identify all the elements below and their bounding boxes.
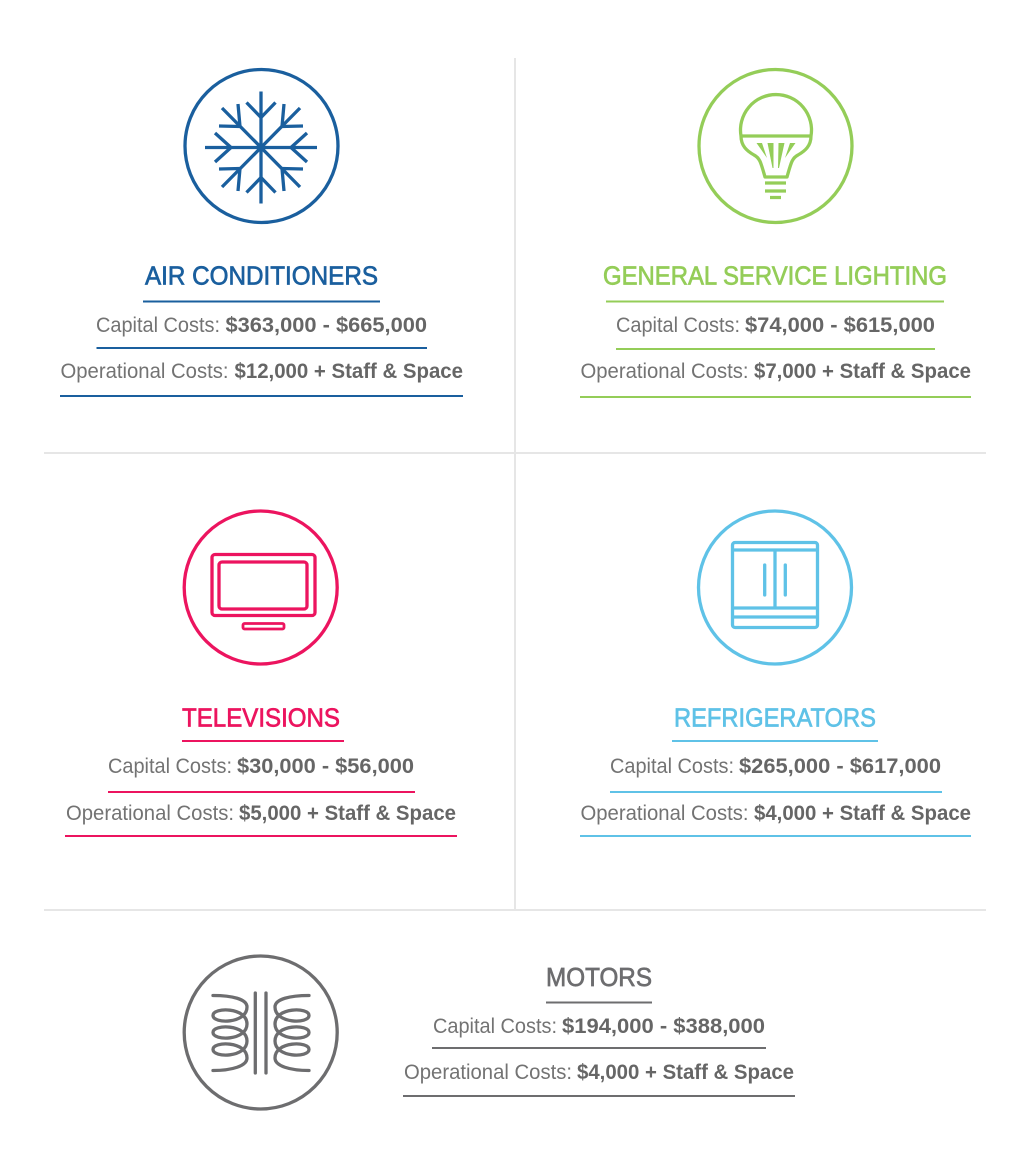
capital costs row: $363,000 - $665,000	[226, 314, 427, 337]
capital costs row: $74,000 - $615,000	[745, 314, 935, 337]
capital costs row	[616, 314, 935, 337]
capital costs row: Capital Costs:	[616, 314, 740, 337]
operational costs row: Operational Costs:	[60, 360, 228, 383]
icon: television in circle	[184, 511, 337, 664]
operational costs row: Operational Costs:	[580, 360, 748, 383]
operational costs row: $4,000 + Staff & Space	[577, 1061, 794, 1084]
capital costs row: $265,000 - $617,000	[739, 755, 941, 778]
panel: general service lighting	[580, 70, 971, 397]
operational costs row: Operational Costs:	[404, 1061, 572, 1084]
operational costs row: $5,000 + Staff & Space	[239, 802, 456, 825]
operational costs row: $4,000 + Staff & Space	[754, 802, 971, 825]
capital costs row	[96, 314, 427, 337]
heading: general service lighting: GENERAL SERVICE LIGHTING	[603, 260, 947, 290]
icon: snowflake in circle	[185, 70, 338, 222]
heading: motors: MOTORS	[546, 962, 652, 992]
capital costs row: Capital Costs:	[108, 755, 232, 778]
capital costs row: $194,000 - $388,000	[562, 1015, 765, 1038]
operational costs row: Operational Costs:	[580, 802, 748, 825]
operational costs row	[404, 1061, 794, 1084]
icon: motor coils in circle	[184, 956, 337, 1109]
heading: televisions: TELEVISIONS	[182, 702, 340, 732]
heading: air conditioners: AIR CONDITIONERS	[145, 260, 378, 290]
operational costs row	[66, 802, 456, 825]
capital costs row	[610, 755, 941, 778]
capital costs row	[433, 1015, 765, 1038]
panel: televisions	[65, 511, 457, 836]
operational costs row	[580, 360, 971, 383]
capital costs row: Capital Costs:	[433, 1015, 557, 1038]
operational costs row	[60, 360, 463, 383]
bulb rays	[756, 143, 796, 168]
capital costs row: Capital Costs:	[610, 755, 734, 778]
capital costs row: Capital Costs:	[96, 314, 220, 337]
icon: refrigerator in circle	[698, 511, 852, 664]
panel: motors	[184, 956, 795, 1109]
operational costs row	[580, 802, 971, 825]
capital costs row	[108, 755, 414, 778]
operational costs row: $7,000 + Staff & Space	[754, 360, 971, 383]
capital costs row: $30,000 - $56,000	[237, 755, 414, 778]
operational costs row: $12,000 + Staff & Space	[234, 360, 463, 383]
icon: light bulb in circle	[699, 70, 852, 222]
panel: air conditioners	[60, 70, 463, 396]
panel: refrigerators	[580, 511, 971, 836]
operational costs row: Operational Costs:	[66, 802, 234, 825]
heading: refrigerators: REFRIGERATORS	[674, 702, 876, 732]
